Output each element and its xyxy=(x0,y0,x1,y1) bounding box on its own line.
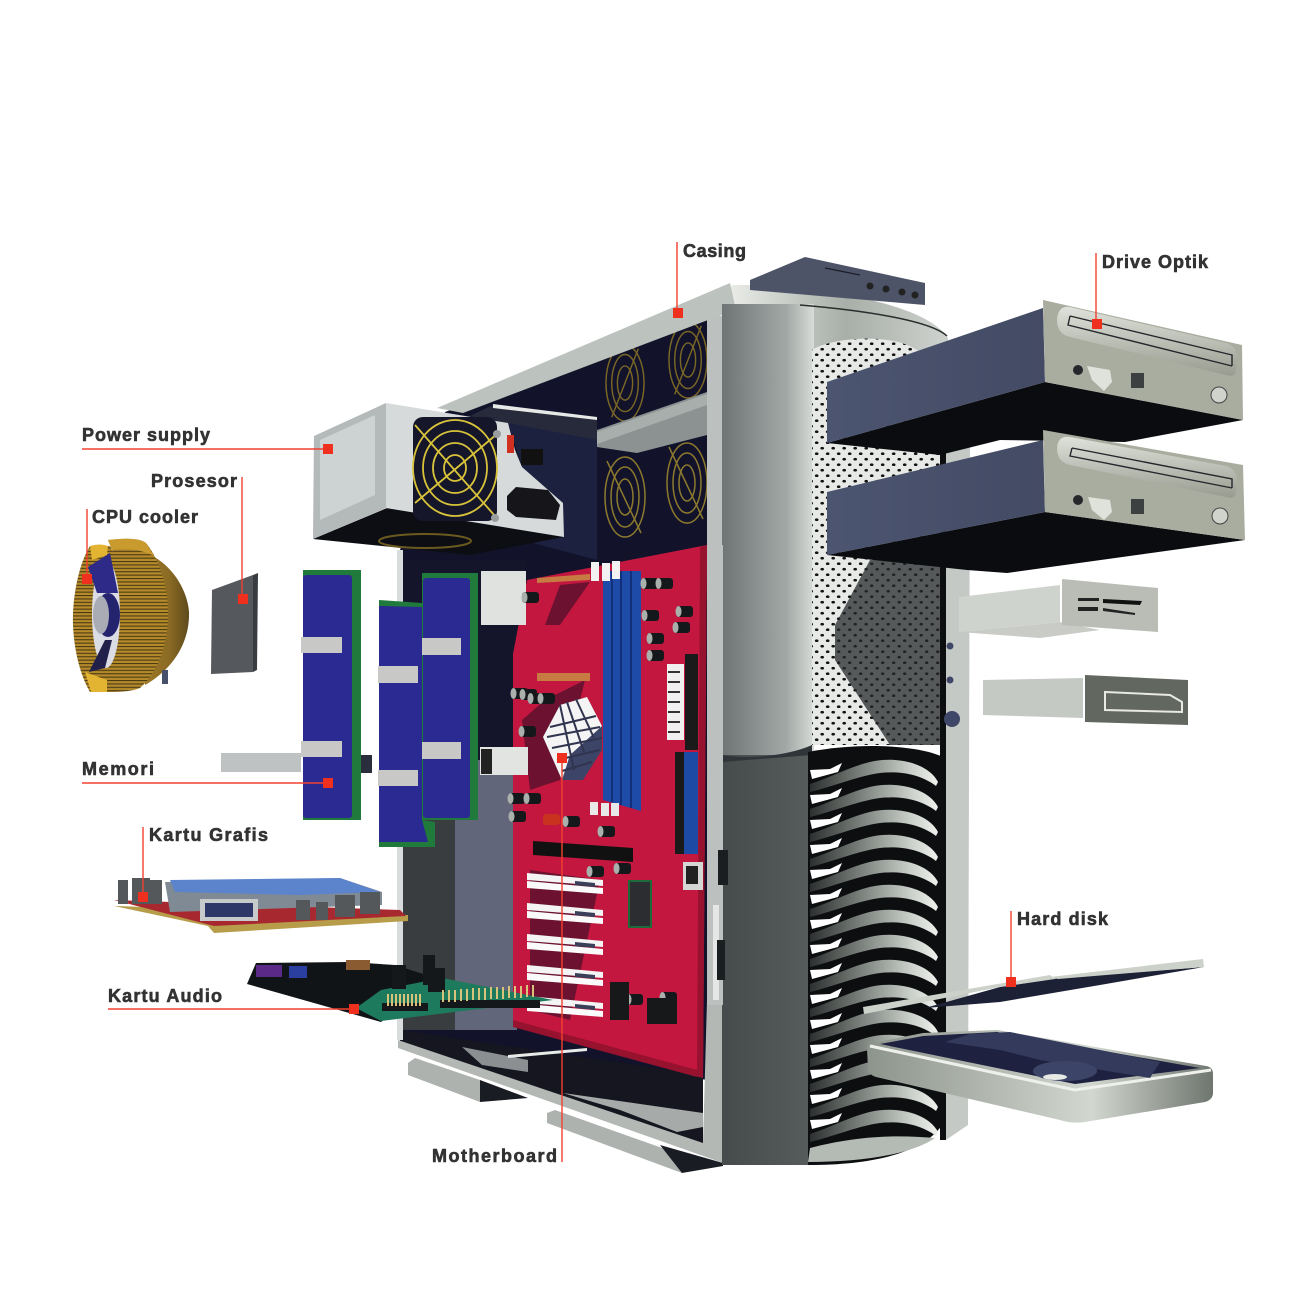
label: Motherboard xyxy=(432,753,567,1166)
label: Kartu Grafis xyxy=(138,825,268,902)
left wall xyxy=(397,550,525,1040)
label: Kartu Grafis: Kartu Grafis xyxy=(149,825,268,845)
chipset heat sink xyxy=(543,697,602,780)
hard disk base xyxy=(867,1030,1213,1123)
power socket and switch xyxy=(507,435,560,520)
label: Power supply: Power supply xyxy=(82,425,210,445)
hard disk xyxy=(863,959,1213,1123)
memory modules xyxy=(221,570,478,847)
casing xyxy=(397,257,970,1173)
rear cap xyxy=(140,552,189,685)
front ring xyxy=(73,546,125,692)
label: Memori xyxy=(82,759,333,788)
fan grille xyxy=(413,417,501,522)
capacitors xyxy=(508,578,693,1005)
label: Hard disk xyxy=(1006,909,1109,987)
PSU rear panel backing xyxy=(508,423,597,560)
label: Kartu Audio: Kartu Audio xyxy=(108,986,222,1006)
label: Prosesor xyxy=(151,471,248,604)
drive bracket xyxy=(983,675,1188,725)
label: Prosesor: Prosesor xyxy=(151,471,237,491)
label: Casing: Casing xyxy=(683,241,746,261)
label: Hard disk: Hard disk xyxy=(1017,909,1109,929)
copper strips xyxy=(537,574,590,681)
label: Drive Optik xyxy=(1092,252,1209,329)
interior back wall xyxy=(400,318,708,1080)
power supply xyxy=(313,403,597,560)
hard disk lid xyxy=(863,959,1204,1014)
power connector blocks xyxy=(480,571,528,775)
label: Power supply xyxy=(82,425,333,454)
module 3 xyxy=(420,573,478,820)
CPU cooler xyxy=(73,539,189,692)
module 1 xyxy=(301,570,361,820)
floor and base xyxy=(398,1000,723,1173)
rear IO port strip xyxy=(713,850,728,1000)
RAM slots xyxy=(590,561,641,816)
silver rear post xyxy=(707,316,723,556)
optical drive 1 xyxy=(827,300,1243,455)
yellow crescents xyxy=(90,544,108,560)
module 2 xyxy=(378,600,435,847)
label: Drive Optik: Drive Optik xyxy=(1102,252,1209,272)
right rail xyxy=(940,430,970,1140)
top shoulder xyxy=(722,285,948,360)
label: CPU cooler: CPU cooler xyxy=(92,507,198,527)
fan opening xyxy=(92,560,120,668)
ventilation fins xyxy=(808,746,945,1165)
label: CPU cooler xyxy=(82,507,198,584)
label: Kartu Audio xyxy=(108,986,359,1014)
fin stack xyxy=(108,539,168,692)
card reader xyxy=(959,579,1158,638)
motherboard xyxy=(480,545,728,1078)
perforated mesh xyxy=(812,339,945,745)
memory bar xyxy=(221,753,372,773)
AGP and PCI slots xyxy=(527,841,633,1017)
optical drive 2 xyxy=(827,430,1245,573)
chip xyxy=(610,862,703,1024)
label: Memori: Memori xyxy=(82,759,154,779)
graphics card xyxy=(114,878,408,933)
processor xyxy=(211,573,258,674)
front pillar xyxy=(722,304,814,1165)
top rim xyxy=(437,283,736,413)
IDE and power connectors xyxy=(667,654,698,854)
rear fans xyxy=(470,322,707,537)
label: Casing xyxy=(673,241,746,318)
top control panel xyxy=(750,257,925,305)
audio card xyxy=(247,955,553,1022)
label: Motherboard: Motherboard xyxy=(432,1146,557,1166)
